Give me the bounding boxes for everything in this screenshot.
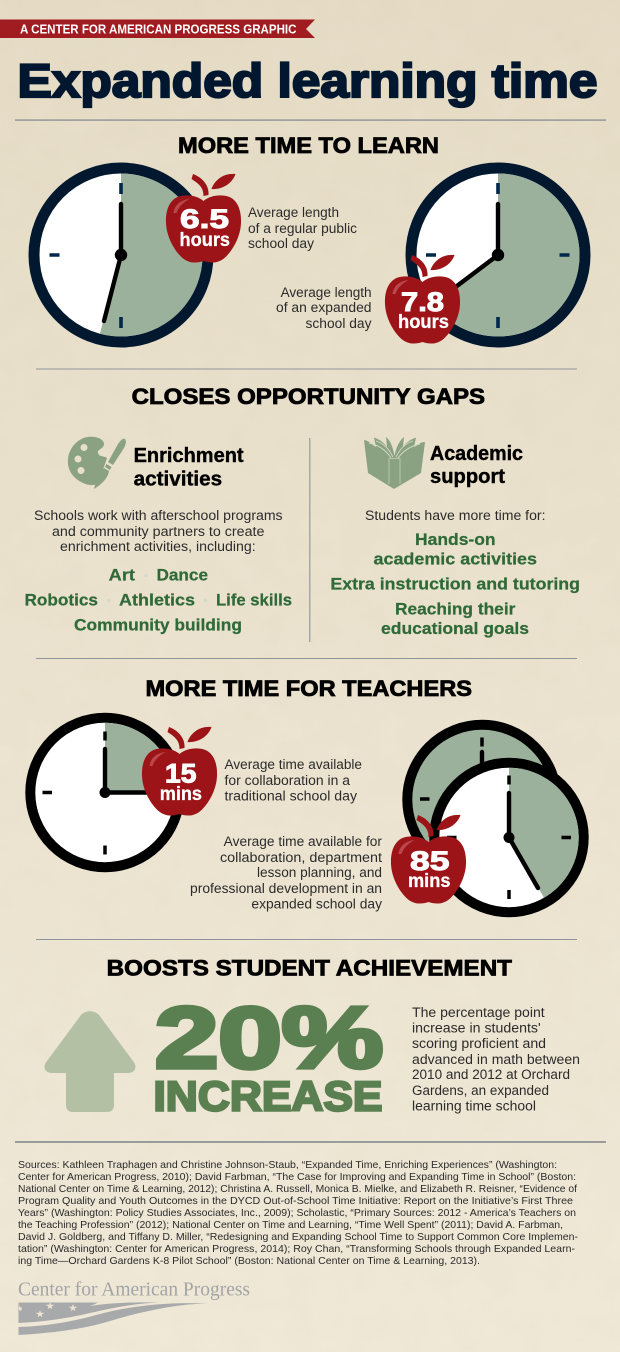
icon: up arrow (45, 1011, 135, 1112)
text: expanded collaboration time: Average time available for (224, 834, 383, 849)
text: expanded collaboration time: professional development in an (190, 881, 382, 896)
text: expanded school day: Average length (281, 285, 372, 300)
text: traditional school day: for collaboration in a (224, 773, 351, 788)
list: academic support: Hands-on (415, 530, 496, 549)
apple: 85 mins (391, 815, 466, 904)
icon: open book (364, 437, 425, 489)
apple: 15 mins (142, 727, 217, 816)
clock: 15 minutes (30, 718, 180, 867)
heading: enrichment activities: activities (134, 469, 222, 491)
list: academic support: Reaching their (395, 599, 516, 618)
text: regular school day: school day (248, 236, 314, 251)
heading: academic support (430, 443, 523, 488)
heading: academic support: support (430, 466, 505, 488)
list: enrichment activities: Athletics (119, 591, 195, 610)
apple: 7.8 hours (385, 255, 460, 344)
logo: center for american progress: Center for American Progress (18, 1279, 250, 1301)
clock: 6.5 hours (34, 168, 208, 342)
sources: Years” (Washington: Policy Studies Associates, Inc., 2009); Scholastic, “Primary Sources: 2012 - America’s Teachers on (18, 1208, 576, 1219)
text: expanded school day: school day (306, 316, 372, 331)
text: increase description: The percentage point (412, 1005, 545, 1020)
heading: enrichment activities: Enrichment (134, 445, 244, 467)
icon: paint palette (68, 437, 126, 489)
text: increase description (412, 1005, 580, 1114)
text: traditional school day (224, 757, 362, 804)
apple: 15 mins: mins (160, 784, 202, 805)
text: expanded collaboration time: lesson planning, and (257, 865, 382, 880)
list: enrichment activities (24, 566, 292, 635)
apple: 7.8 hours: 7.8 (401, 287, 444, 317)
text: enrichment description: and community partners to create (52, 524, 264, 539)
text: increase description: Gardens, an expanded (412, 1083, 549, 1098)
clock: 7.8 hours (411, 168, 585, 342)
list: enrichment activities: Art (109, 566, 135, 585)
big number: 20% increase: INCREASE (154, 1073, 382, 1120)
section heading: boosts student achievement: BOOSTS STUDENT ACHIEVEMENT (107, 956, 513, 981)
text: traditional school day: Average time available (224, 757, 362, 772)
text: increase description: learning time school (412, 1099, 536, 1114)
text: enrichment description (34, 508, 283, 554)
text: academic description: Students have more time for: (365, 508, 546, 523)
list: academic support: educational goals (381, 619, 529, 638)
clock: 85 minutes (434, 763, 584, 912)
section heading: more time to learn: MORE TIME TO LEARN (178, 133, 439, 158)
clock: back clock, full green (407, 725, 557, 874)
sources: the Teaching Profession” (2012); National Center on Time and Learning, “Time Well Spent” (2011); David A. Farbman, (18, 1220, 563, 1231)
text: expanded collaboration time (190, 834, 383, 912)
big number: 20% increase (154, 990, 383, 1120)
list: academic support: academic activities (374, 549, 537, 568)
logo: center for american progress (18, 1279, 250, 1335)
list: enrichment activities: Community building (74, 616, 242, 635)
heading: academic support: Academic (430, 443, 523, 465)
sources (18, 1160, 578, 1267)
text: expanded collaboration time: expanded school day (251, 897, 382, 912)
list: enrichment activities: Robotics (24, 591, 98, 610)
title: Expanded learning time (18, 54, 598, 107)
text: regular school day: of a regular public (248, 221, 357, 236)
apple: 85 mins: mins (408, 871, 450, 892)
sources: Program Quality and Youth Outcomes in the DYCD Out-of-School Time Initiative: Report on the Initiative’s First Three (18, 1196, 573, 1207)
text: increase description: 2010 and 2012 at Orchard (412, 1067, 570, 1082)
text: expanded collaboration time: collaboration, department (220, 850, 382, 865)
section heading: more time for teachers: MORE TIME FOR TEACHERS (146, 676, 472, 701)
sources: tation” (Washington: Center for American Progress, 2014); Roy Chan, “Transforming Schools through Expanded Learn- (18, 1244, 575, 1255)
text: regular school day (248, 205, 357, 251)
sources: National Center on Time & Learning, 2012); Christina A. Russell, Monica B. Mielke, and Elizabeth R. Reisner, “Evidence of (18, 1184, 577, 1195)
sources: Sources: Kathleen Traphagen and Christine Johnson-Staub, “Expanded Time, Enriching Experiences” (Washington: (18, 1160, 557, 1171)
list: academic support: Extra instruction and tutoring (330, 574, 580, 593)
text: expanded school day: of an expanded (276, 300, 372, 315)
list: enrichment activities: Dance (156, 566, 208, 585)
list: academic support (330, 530, 580, 638)
apple: 6.5 hours: 6.5 (180, 204, 229, 234)
banner: A CENTER FOR AMERICAN PROGRESS GRAPHIC (20, 22, 297, 36)
sources: David J. Goldberg, and Tiffany D. Miller, “Redesigning and Expanding School Time to Support Common Core Implemen- (18, 1232, 578, 1243)
apple: 15 mins: 15 (165, 759, 196, 789)
apple: 6.5 hours (166, 174, 241, 263)
apple: 85 mins: 85 (410, 846, 449, 876)
sources: Center for American Progress, 2010); David Farbman, “The Case for Improving and Expanding Time in School” (Boston: (18, 1172, 576, 1183)
text: expanded school day (276, 285, 372, 331)
text: enrichment description: enrichment activities, including: (60, 539, 256, 554)
sources: ing Time—Orchard Gardens K-8 Pilot School” (Boston: National Center on Time & Learning, 2013). (18, 1256, 480, 1267)
section heading: closes opportunity gaps: CLOSES OPPORTUNITY GAPS (132, 384, 485, 409)
apple: 7.8 hours: hours (398, 312, 449, 333)
text: increase description: scoring proficient and (412, 1036, 546, 1051)
text: regular school day: Average length (248, 205, 339, 220)
heading: enrichment activities (134, 445, 244, 491)
text: enrichment description: Schools work with afterschool programs (34, 508, 283, 523)
apple: 6.5 hours: hours (180, 230, 230, 251)
list: enrichment activities: Life skills (216, 591, 292, 610)
text: increase description: increase in students' (412, 1021, 541, 1036)
big number: 20% increase: 20% (155, 990, 383, 1086)
text: traditional school day: traditional school day (224, 789, 357, 804)
text: increase description: advanced in math between (412, 1052, 580, 1067)
